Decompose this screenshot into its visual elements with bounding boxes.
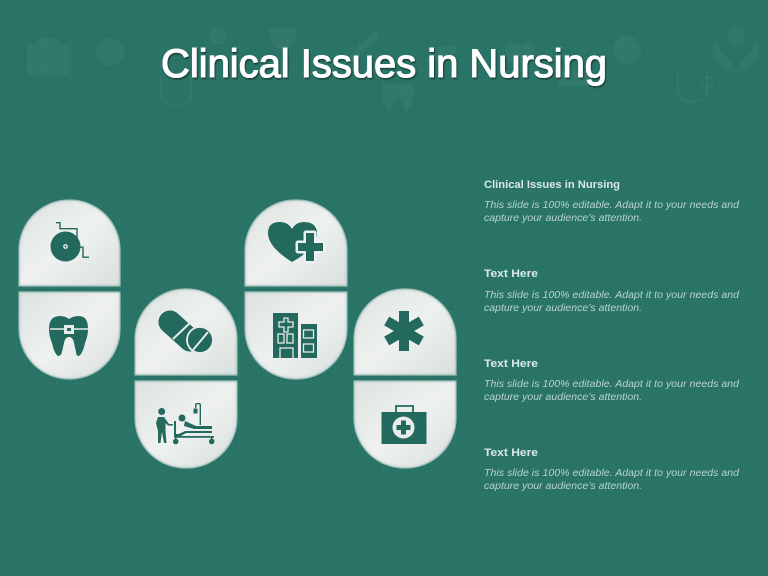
capsule half: hospital xyxy=(245,292,347,379)
capsule half: asterisk xyxy=(354,289,456,375)
body 3: capture your audience’s attention. xyxy=(484,391,642,403)
capsule half: pill xyxy=(135,289,237,375)
heading 4: Text Here xyxy=(484,447,538,459)
heading 2: Text Here xyxy=(484,268,538,280)
body 4: This slide is 100% editable. Adapt it to your needs and xyxy=(484,467,740,479)
capsule: wheelchair and tooth xyxy=(19,200,120,379)
body 2: This slide is 100% editable. Adapt it to your needs and xyxy=(484,289,740,301)
capsule half: wheelchair xyxy=(19,200,120,286)
capsule half: first aid kit xyxy=(354,381,456,468)
text block 1 xyxy=(484,179,740,224)
heading 3: Text Here xyxy=(484,358,538,370)
background ghost icons xyxy=(27,27,760,112)
heading 1: Clinical Issues in Nursing xyxy=(484,179,620,191)
body 3: This slide is 100% editable. Adapt it to your needs and xyxy=(484,378,740,390)
capsule: pill and patient bed xyxy=(135,289,237,468)
body 1: capture your audience’s attention. xyxy=(484,212,642,224)
capsule: heart and hospital xyxy=(245,200,347,379)
text block 4 xyxy=(484,447,740,492)
capsule half: tooth xyxy=(19,292,120,379)
title: Clinical Issues in Nursing xyxy=(161,42,607,86)
body 2: capture your audience’s attention. xyxy=(484,302,642,314)
capsule half: patient on bed xyxy=(135,381,237,468)
capsule: asterisk and first aid kit xyxy=(354,289,456,468)
text block 2 xyxy=(484,268,740,314)
body 1: This slide is 100% editable. Adapt it to your needs and xyxy=(484,199,740,211)
capsule half: heart plus xyxy=(245,200,347,286)
text block 3 xyxy=(484,358,740,403)
body 4: capture your audience’s attention. xyxy=(484,480,642,492)
